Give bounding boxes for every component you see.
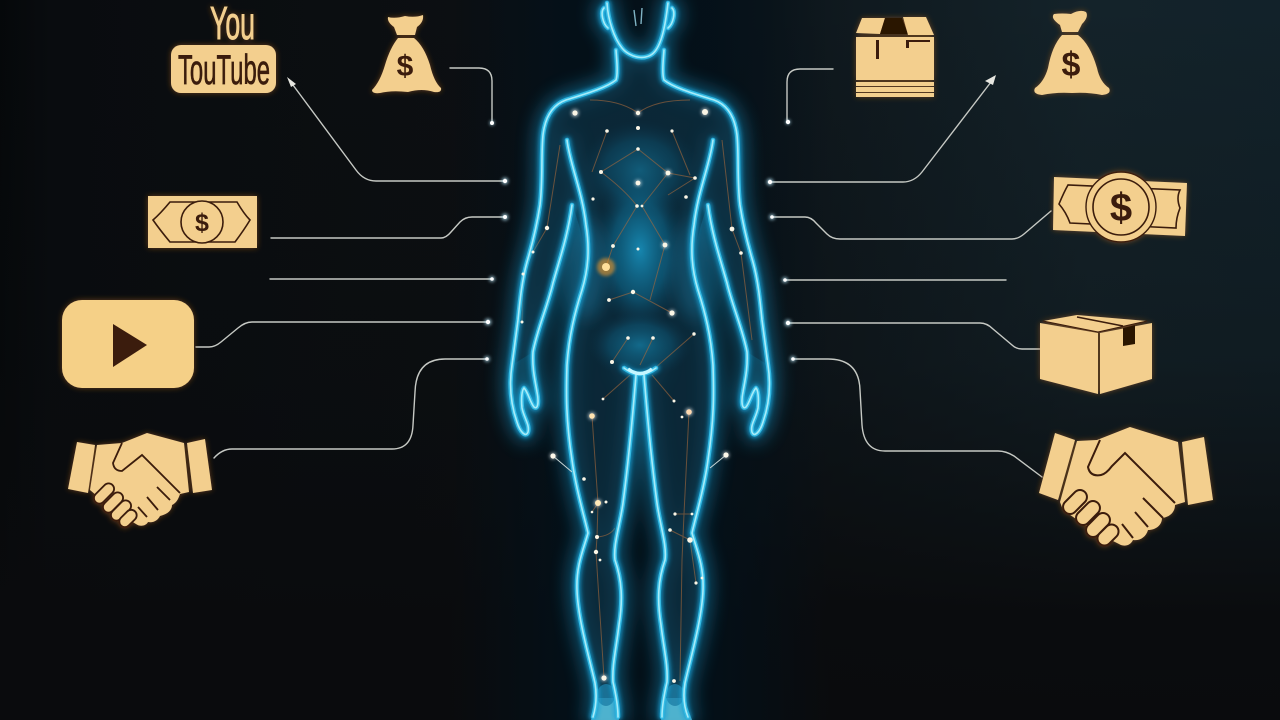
icon: left money bag [372,15,441,93]
icon: left handshake [68,433,212,529]
icon: right money bag [1034,11,1110,95]
feet [591,684,692,720]
icon: right handshake [1039,427,1213,548]
connector: right handshake [793,359,1042,477]
icon: right banknote with coin: $ [1110,186,1132,230]
human figure: glowing holographic body [511,3,769,720]
connector: right banknote [772,211,1051,239]
connector: left handshake [214,359,485,458]
icon: left money bag: $ [397,50,414,83]
icon: right money bag: $ [1062,46,1081,84]
icon: YouTube logo: TouTube [178,46,270,93]
connector: left banknote [271,217,503,238]
connector: right box [787,69,833,122]
connector: YouTube arrow [290,81,503,181]
connector: left play button [196,322,486,347]
internal network lines [522,100,752,681]
body node glow [550,108,730,682]
body nodes [520,109,743,683]
icon: YouTube logo [171,0,276,93]
connector: left straight line [270,278,491,280]
translucent body fill [512,50,768,720]
arrowhead: YouTube [287,77,296,87]
outer glow [511,3,769,717]
connector: right straight line [785,279,1006,281]
icon: left banknote: $ [195,209,209,237]
connector: right shipping box [788,323,1040,349]
connector end dots [484,120,796,362]
icon: open cardboard box [856,17,934,97]
icon: play button [62,300,194,388]
connector: left money bag [450,68,492,123]
connector: right arrow [769,82,991,182]
connector lines [196,68,1051,477]
glowing orange node [597,258,615,276]
face detail [634,8,642,26]
body outline [511,3,769,717]
crotch highlight [628,369,652,374]
arrowhead: right [985,75,996,85]
thigh callout pins [550,452,729,472]
icon: closed shipping box [1040,315,1152,394]
icon: left banknote [148,196,257,248]
icon: right banknote with coin [1053,172,1187,242]
